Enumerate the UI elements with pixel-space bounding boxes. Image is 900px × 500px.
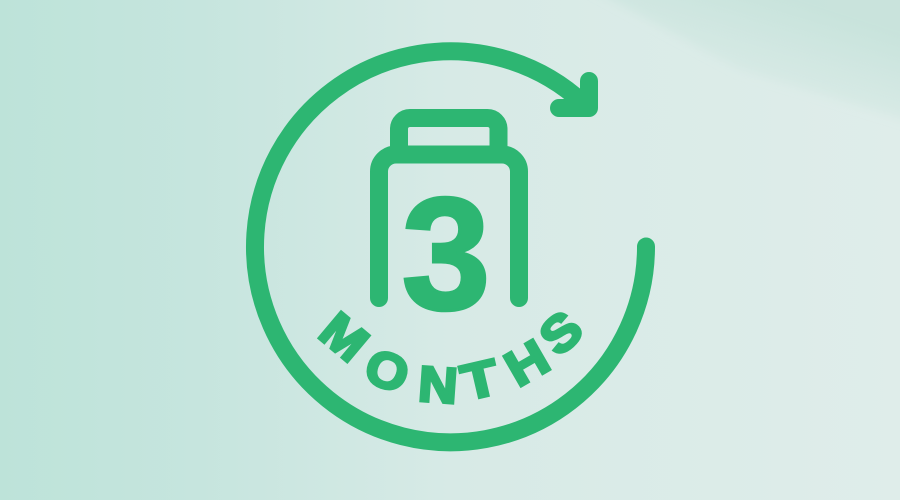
label: MONTHS on curve: S — [529, 300, 594, 366]
label: MONTHS on curve: M — [309, 302, 379, 372]
label: MONTHS on curve: N — [417, 357, 459, 415]
label: MONTHS on curve: O — [358, 338, 416, 405]
number 3: 3 — [402, 164, 490, 343]
label: MONTHS on curve: H — [496, 329, 559, 398]
label: MONTHS on curve: T — [456, 348, 504, 411]
icon: supplement bottle — [379, 118, 519, 298]
label: MONTHS on curve — [309, 300, 594, 415]
icon: circular arrow — [255, 51, 646, 442]
